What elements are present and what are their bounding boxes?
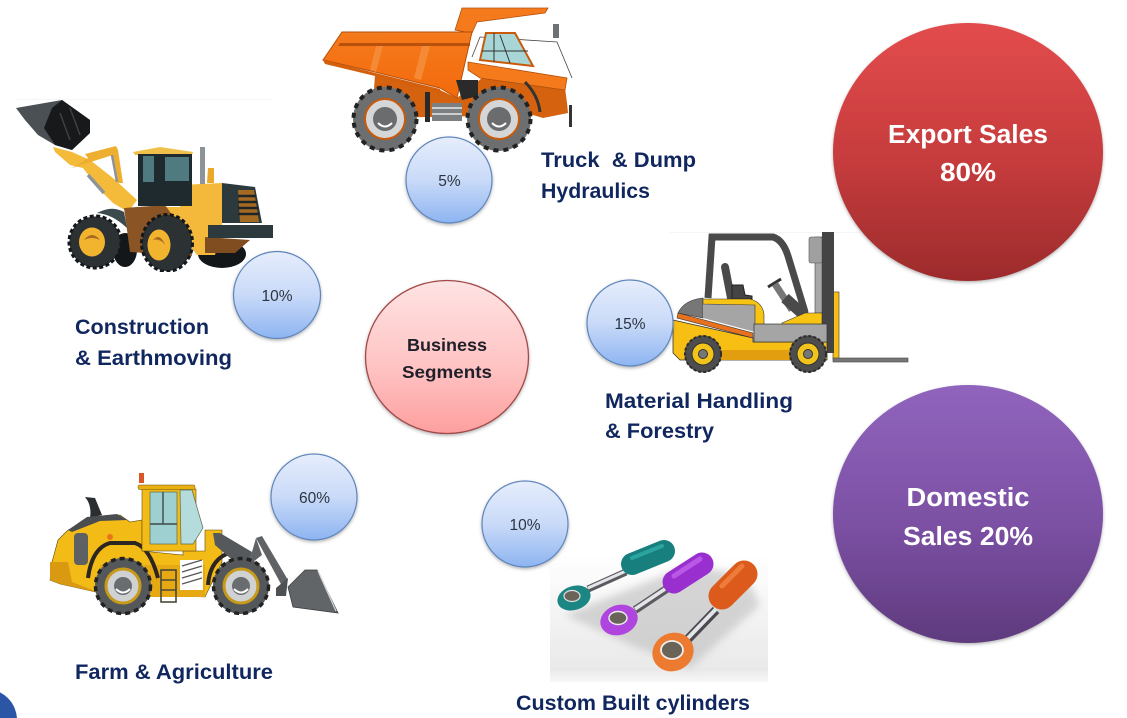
bubble: material handling 15%: 15% <box>614 316 646 333</box>
icon: construction wheel loader <box>16 100 273 280</box>
label: material handling and forestry: & Forestry <box>605 420 714 443</box>
label: construction and earthmoving: Construction <box>75 316 209 339</box>
bubble: custom cylinders 10% <box>482 481 568 567</box>
bubble: truck 5%: 5% <box>438 173 461 190</box>
label: truck and dump hydraulics: Truck & Dump <box>541 149 696 172</box>
label: construction and earthmoving: & Earthmoving <box>75 347 232 370</box>
label: truck and dump hydraulics: Hydraulics <box>541 180 650 203</box>
bubble: construction 10%: 10% <box>261 288 293 305</box>
label: material handling and forestry: Material Handling <box>605 390 793 413</box>
corner logo fragment <box>0 689 17 718</box>
center bubble: business segments: Business <box>407 335 487 355</box>
circle: domestic sales: Sales 20% <box>903 523 1033 551</box>
bubble: farm 60% <box>271 454 357 540</box>
bubble: construction 10% <box>234 252 320 338</box>
bubble: material handling 15% <box>587 280 673 366</box>
bubble: farm 60%: 60% <box>299 490 330 507</box>
circle: export sales <box>833 23 1103 281</box>
icon: farm wheel loader <box>50 473 338 614</box>
circle: export sales: 80% <box>940 159 996 187</box>
label: material handling and forestry <box>605 390 793 443</box>
icon: forklift <box>670 232 908 372</box>
icon: hydraulic cylinders <box>550 546 768 682</box>
circle: domestic sales: Domestic <box>906 484 1030 512</box>
center bubble: business segments: Segments <box>402 362 492 382</box>
circle: export sales: Export Sales <box>888 121 1048 149</box>
center bubble: business segments <box>366 280 528 434</box>
label: custom built cylinders: Custom Built cylinders <box>516 692 750 715</box>
label: construction and earthmoving <box>75 316 232 370</box>
circle: domestic sales <box>833 385 1103 643</box>
icon: dump truck <box>323 8 572 151</box>
label: truck and dump hydraulics <box>541 149 696 203</box>
bubble: custom cylinders 10%: 10% <box>509 517 541 534</box>
label: farm and agriculture: Farm & Agriculture <box>75 661 273 684</box>
bubble: truck 5% <box>406 137 492 223</box>
